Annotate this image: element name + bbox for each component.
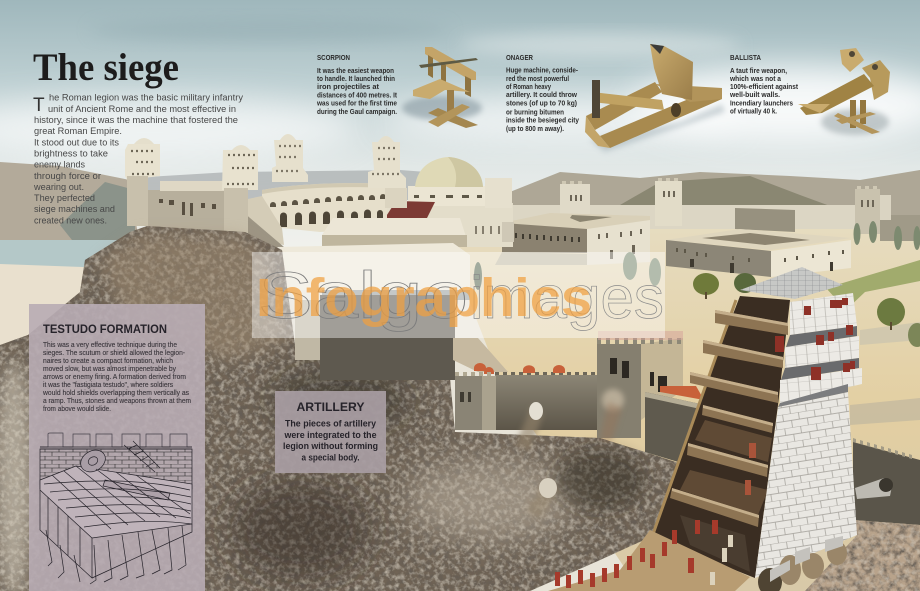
panel: testudo formation [29, 304, 205, 591]
legionaries on wooden ramp [548, 515, 750, 591]
testudo body text: it was the "fastigiata testudo", where soldiers [43, 380, 173, 389]
tower soldiers [745, 298, 855, 495]
scorpion text [316, 53, 398, 116]
onager text: inside the besieged city [506, 116, 579, 124]
rock cliff [0, 226, 700, 591]
scorpion text: was used for the first time [316, 98, 397, 108]
onager text: Huge machine, conside- [506, 66, 579, 74]
intro text block [33, 92, 243, 226]
testudo body text: from above would slide. [43, 404, 111, 413]
intro text block: brightness to take [34, 148, 108, 160]
ballista text [729, 53, 799, 116]
testudo body text: naires to create a compact formation, which [43, 356, 173, 365]
background: sky [0, 0, 920, 270]
background: green field [826, 260, 920, 425]
intro text block: wearing out. [33, 182, 84, 193]
testudo heading: TESTUDO FORMATION [43, 322, 167, 336]
artillery heading: ARTILLERY [296, 400, 364, 414]
tower roof [740, 267, 843, 299]
right wall and battering ram [853, 438, 920, 525]
onager text: red the most powerful [506, 74, 569, 83]
palace: outer wall [147, 181, 284, 248]
tower lower clad wall [755, 392, 857, 578]
artillery body text [283, 418, 378, 462]
icon: scorpion weapon [402, 47, 482, 128]
onager text: or burning bitumen [506, 108, 564, 116]
ballista text: well-built walls. [729, 90, 780, 99]
ballista text: A taut fire weapon, [730, 66, 787, 75]
testudo body text: a ramp. Thus, stones and weapons thrown at them [43, 396, 191, 405]
testudo body text: would hold shields overlapping them vertically as [42, 388, 189, 397]
palace: flat-roofed halls [278, 218, 470, 300]
intro text block: siege machines and [34, 204, 115, 215]
building: courtyard block two [666, 229, 851, 277]
scorpion text: to handle. It launched thin [317, 74, 395, 83]
tower upper tiers [778, 293, 862, 407]
intro text block: enemy lands [34, 160, 85, 170]
intro text block: great Roman Empire. [34, 126, 122, 137]
palace: dome building [385, 157, 514, 247]
onager text: (up to 800 m away). [506, 124, 564, 133]
fortress: lower curtain wall [474, 363, 603, 430]
background buildings: distant fort walls and towers [510, 178, 920, 241]
tower interior lit timber [680, 420, 772, 515]
title: The siege [33, 46, 179, 89]
testudo body text: sieges. The scutum or shield allowed the legion- [43, 348, 185, 357]
intro text block: They perfected [34, 193, 95, 204]
testudo body text: moved slow, but was almost impenetrable by [43, 364, 176, 373]
scorpion text: during the Gaul campaign. [317, 107, 397, 116]
scorpion text: SCORPION [317, 53, 350, 62]
tower interior [652, 296, 790, 578]
onager text: of Roman heavy [506, 82, 551, 91]
palace: towers [125, 134, 407, 233]
scorpion text: It was the easiest weapon [317, 66, 394, 75]
panel: artillery [275, 391, 386, 473]
ballista text: of virtually 40 k. [730, 106, 777, 116]
intro text block: through force or [34, 171, 102, 182]
building: courtyard block one [495, 213, 650, 265]
fortress: gate tower [597, 331, 683, 438]
fortress: ramp [453, 338, 508, 372]
icon: ballista weapon [798, 48, 890, 135]
artillery body text: were integrated to the [284, 430, 376, 440]
watermark [252, 252, 665, 338]
watermark: Salgo [258, 258, 468, 332]
palace: red roof [385, 201, 435, 218]
onager text [506, 53, 579, 133]
fortress: great wall under the palace [295, 295, 455, 380]
tower timber frame [652, 300, 736, 537]
trees [474, 221, 920, 347]
fortress: right curtain wall with soldiers [645, 386, 705, 470]
intro text block: created new ones. [34, 216, 107, 226]
background: distant hills [0, 162, 920, 345]
onager text: artillery. It could throw [506, 90, 577, 99]
intro text block: he Roman legion was the basic military infantry [49, 92, 243, 104]
intro text block: history, since it was the machine that fostered the [34, 115, 238, 126]
rubble ground [805, 520, 920, 591]
testudo body text: This was a very effective technique during the [43, 340, 177, 349]
testudo body text: arrows or enemy firing. A formation derived from [43, 372, 186, 381]
onager text: ONAGER [506, 53, 534, 62]
tower wheels [758, 536, 847, 591]
scorpion text: iron projectiles at [317, 82, 380, 91]
ballista text: which was not a [729, 74, 782, 83]
palace: arcaded curved wall [262, 183, 387, 232]
intro text block: It stood out due to its [34, 138, 119, 148]
artillery body text: a special body. [302, 452, 360, 462]
icon: onager weapon [585, 44, 725, 152]
ballista text: Incendiary launchers [730, 98, 793, 108]
testudo body text [42, 340, 191, 413]
watermark: Infographics [256, 268, 592, 328]
testudo illustration [40, 433, 192, 584]
intro text block: unit of Ancient Rome and the most effective in [48, 104, 236, 115]
artillery body text: The pieces of artillery [285, 418, 376, 428]
background: plain [440, 225, 920, 591]
scorpion text: distances of 400 metres. It [317, 90, 398, 100]
tower floors [670, 310, 788, 527]
siege tower [652, 267, 862, 591]
artillery body text: legion without forming [283, 441, 378, 451]
watermark: images [470, 264, 664, 331]
projectile: stone and dust trails [515, 389, 624, 518]
fortress: small tower [455, 372, 496, 430]
intro text block: T [33, 95, 45, 116]
ballista text: 100%-efficient against [730, 82, 799, 91]
ballista text: BALLISTA [730, 53, 761, 62]
onager text: stones (of up to 70 kg) [506, 98, 578, 108]
